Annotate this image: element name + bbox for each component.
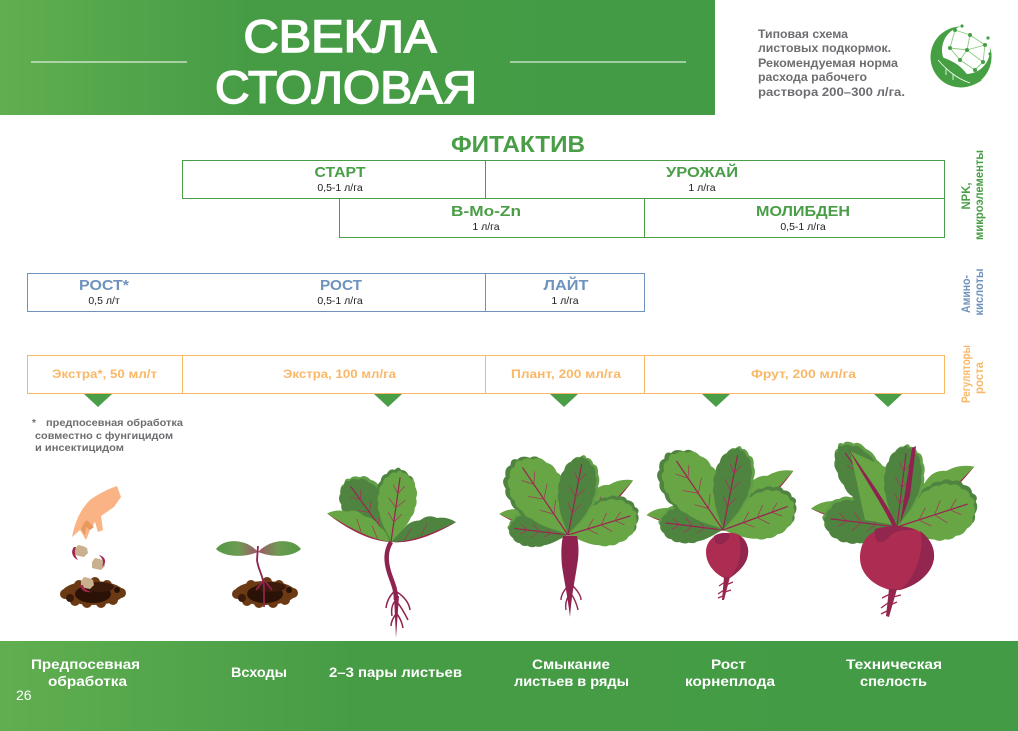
illustration: plant at canopy closure: [491, 442, 646, 617]
stage label: maturity: [846, 656, 942, 689]
intro text: листовых подкормок.: [758, 41, 891, 55]
intro text: раствора 200–300 л/га.: [758, 85, 905, 99]
icon: logo: [930, 24, 992, 87]
stage label: sprouts: Всходы: [231, 664, 287, 680]
panel: growth regulators row: Фрут, 200 мл/га: [751, 367, 856, 381]
panel: growth regulators row: Экстра*, 50 мл/т: [52, 367, 157, 381]
label: Рост*: РОСТ*: [79, 277, 129, 294]
label: Рост: [317, 277, 363, 307]
stage label: maturity: спелость: [860, 673, 927, 689]
title: [31, 11, 686, 113]
panel: amino acids row: [28, 274, 644, 312]
label: Старт: СТАРТ: [314, 164, 366, 181]
stage label: maturity: Техническая: [846, 656, 942, 672]
illustration: seedling: [216, 541, 301, 608]
label: Рост: 0,5-1 л/га: [317, 295, 363, 307]
stage label: pre-sowing: Предпосевная: [31, 656, 140, 672]
panel: NPK row 2: [340, 198, 944, 238]
side label: regulators: Регуляторы: [961, 345, 973, 403]
footer band: [0, 641, 1018, 731]
label: Молибден: [756, 203, 850, 233]
illustration: hand with seeds and soil: [60, 486, 126, 608]
label: Молибден: 0,5-1 л/га: [780, 221, 826, 233]
side label: NPK: микроэлементы: [974, 150, 986, 240]
illustration: growing root crop: [645, 436, 805, 600]
label: Урожай: УРОЖАЙ: [666, 163, 738, 181]
intro text: [758, 27, 905, 99]
side label: NPK: NPK,: [961, 182, 973, 210]
stage label: leaf pairs: 2–3 пары листьев: [329, 664, 462, 680]
footnote: предпосевная обработка: [46, 417, 183, 429]
panel: growth regulators row: Экстра, 100 мл/га: [283, 367, 396, 381]
panel: growth regulators row: Плант, 200 мл/га: [511, 367, 621, 381]
illustration: technical maturity: [810, 430, 987, 617]
label: Рост: РОСТ: [320, 277, 362, 294]
label: Лайт: 1 л/га: [551, 295, 579, 307]
title: СВЕКЛА: [244, 11, 436, 62]
title: СТОЛОВАЯ: [215, 62, 477, 113]
stage label: pre-sowing: [31, 656, 140, 689]
side label: amino acids: [961, 268, 986, 316]
label: B-Mo-Zn: 1 л/га: [472, 221, 500, 233]
label: B-Mo-Zn: B-Mo-Zn: [451, 203, 521, 220]
footnote: и инсектицидом: [35, 443, 124, 454]
label: Рост*: 0,5 л/т: [88, 295, 120, 307]
side label: amino acids: Амино-: [961, 275, 973, 313]
label: Урожай: [666, 163, 738, 194]
page number: 26: [16, 687, 32, 703]
label: Старт: [314, 164, 366, 194]
side label: NPK: [961, 150, 986, 240]
label: Старт: 0,5-1 л/га: [317, 182, 363, 194]
footnote: совместно с фунгицидом: [35, 430, 173, 442]
label: Молибден: МОЛИБДЕН: [756, 203, 850, 220]
stage label: pre-sowing: обработка: [48, 673, 127, 689]
heading: Фитактив: ФИТАКТИВ: [451, 131, 585, 157]
side label: regulators: [961, 345, 986, 403]
stage label: canopy closure: [514, 656, 629, 689]
intro text: расхода рабочего: [758, 70, 867, 84]
stage label: root growth: [685, 656, 775, 689]
stage label: canopy closure: Смыкание: [532, 656, 610, 672]
stage label: canopy closure: листьев в ряды: [514, 673, 629, 689]
header banner: [0, 0, 715, 115]
label: Урожай: 1 л/га: [688, 182, 716, 194]
stage label: root growth: корнеплода: [685, 673, 775, 689]
label: Рост*: [79, 277, 129, 307]
label: Лайт: ЛАЙТ: [544, 276, 588, 294]
side label: regulators: роста: [974, 361, 986, 394]
stage label: root growth: Рост: [711, 656, 746, 672]
illustration: plant with 2–3 leaf pairs: [325, 465, 458, 638]
label: B-Mo-Zn: [451, 203, 521, 233]
panel: NPK row 1: [182, 160, 944, 198]
label: Лайт: [544, 276, 588, 307]
footnote: *: [32, 418, 36, 429]
intro text: Рекомендуемая норма: [758, 56, 898, 70]
footnote: [32, 417, 183, 454]
side label: amino acids: кислоты: [974, 268, 986, 316]
intro text: Типовая схема: [758, 27, 848, 41]
stage markers: [84, 394, 902, 407]
panel: growth regulators row: [28, 356, 944, 394]
